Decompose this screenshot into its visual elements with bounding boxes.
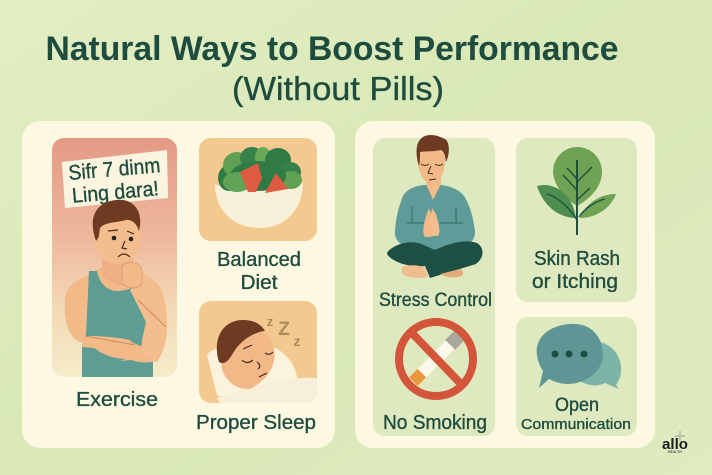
label: Open [555, 395, 599, 416]
icon: sleeping boy: z [267, 314, 274, 329]
icon: no smoking sign [399, 322, 473, 396]
label: No Smoking [383, 411, 487, 434]
label: Proper Sleep [196, 411, 316, 434]
label: exercise: Exercise [76, 388, 158, 411]
icon: green leaves [537, 147, 616, 235]
card: balanced diet [199, 138, 317, 294]
label: Balanced [217, 248, 301, 271]
label: Stress Control [379, 289, 492, 311]
icon: meditating man [387, 135, 483, 278]
card: proper sleep [196, 301, 317, 434]
sign: speech note [62, 150, 168, 208]
card: balanced diet: Diet [240, 271, 278, 294]
title [46, 30, 618, 107]
panel: left [22, 121, 335, 448]
logo: allo health: HEALTH [668, 450, 682, 454]
title: (Without Pills) [232, 70, 444, 107]
label: Skin Rash [534, 247, 620, 270]
card: skin rash or itching [516, 138, 637, 302]
card: exercise [52, 138, 177, 377]
card: stress control and no smoking [373, 135, 495, 436]
card: open communication [516, 317, 637, 436]
sign: speech note: Sifr 7 dinm [68, 154, 161, 185]
icon: sleeping boy [207, 314, 317, 403]
icon: sleeping boy: z [294, 333, 300, 349]
card: open communication: Communication [521, 416, 631, 433]
icon: salad bowl [215, 147, 303, 228]
panel: right [355, 121, 655, 448]
title: Natural Ways to Boost Performance [46, 30, 618, 68]
card: skin rash or itching: or Itching [532, 270, 618, 293]
icon: sleeping boy: Z [278, 319, 290, 340]
logo: allo health: allo [662, 436, 688, 453]
sign: speech note: Ling dara! [71, 177, 160, 208]
icon: speech bubbles [537, 324, 621, 389]
icon: thinking man [65, 200, 167, 377]
